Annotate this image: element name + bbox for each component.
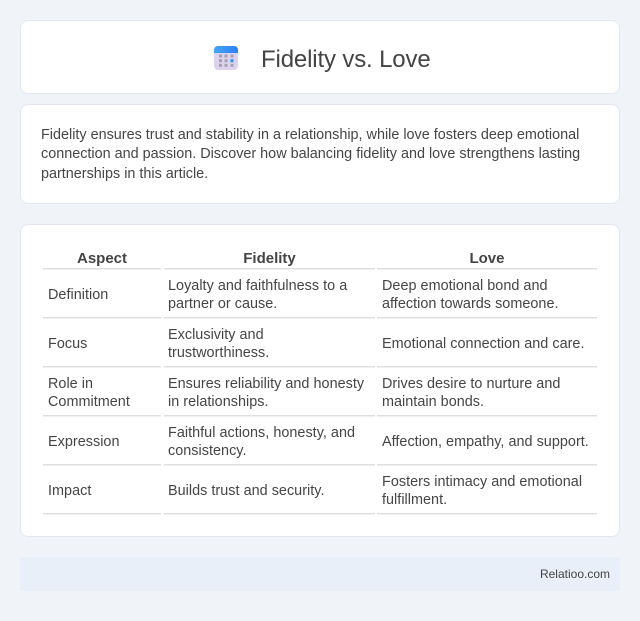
row: Focus: Emotional connection and care. — [382, 336, 584, 352]
row: Definition: affection towards someone. — [382, 296, 559, 312]
row: Focus: Focus — [48, 336, 87, 352]
row: Expression: Expression — [48, 434, 120, 450]
panel: title card — [20, 20, 620, 94]
row: Definition: partner or cause. — [168, 296, 277, 312]
row: Role in Commitment — [48, 376, 560, 410]
text: introduction paragraph — [41, 127, 580, 182]
row: Impact: Fosters intimacy and emotional — [382, 474, 582, 490]
column heading: Aspect: Aspect — [77, 250, 127, 267]
row: Role in Commitment: maintain bonds. — [382, 394, 484, 410]
row: Impact: Builds trust and security. — [168, 483, 324, 499]
text: introduction paragraph: partnerships in this article. — [41, 166, 208, 182]
row: Role in Commitment: Ensures reliability and honesty — [168, 376, 364, 392]
row: Definition — [48, 278, 559, 312]
row: Impact: fulfillment. — [382, 492, 447, 508]
panel: comparison table — [20, 224, 620, 537]
row: Expression: Affection, empathy, and support. — [382, 434, 589, 450]
text: introduction paragraph: connection and passion. Discover how balancing fidelity and love strengthens lasting — [41, 146, 580, 162]
icon: calendar — [214, 46, 238, 70]
row: Role in Commitment: in relationships. — [168, 394, 268, 410]
row: Expression — [48, 425, 589, 459]
row: Definition: Deep emotional bond and — [382, 278, 548, 294]
column heading: Fidelity: Fidelity — [243, 250, 296, 267]
footer bar — [20, 557, 620, 591]
panel: introduction — [20, 104, 620, 204]
row: Role in Commitment: Drives desire to nurture and — [382, 376, 560, 392]
row: Impact: Impact — [48, 483, 91, 499]
column heading: Love: Love — [469, 250, 504, 267]
row: Focus: trustworthiness. — [168, 345, 269, 361]
row: Focus — [48, 327, 584, 361]
row: Definition: Definition — [48, 287, 108, 303]
row: Impact — [48, 474, 582, 508]
title: Fidelity vs. Love — [261, 46, 431, 73]
row: Definition: Loyalty and faithfulness to a — [168, 278, 347, 294]
text: introduction paragraph: Fidelity ensures trust and stability in a relationship, while love fosters deep emotional — [41, 127, 579, 143]
row: Role in Commitment: Commitment — [48, 394, 130, 410]
row: Expression: consistency. — [168, 443, 246, 459]
row: Focus: Exclusivity and — [168, 327, 264, 343]
row: Expression: Faithful actions, honesty, and — [168, 425, 355, 441]
row: Role in Commitment: Role in — [48, 376, 93, 392]
table header — [77, 250, 504, 267]
footer text: site name: Relatioo.com — [540, 567, 610, 581]
